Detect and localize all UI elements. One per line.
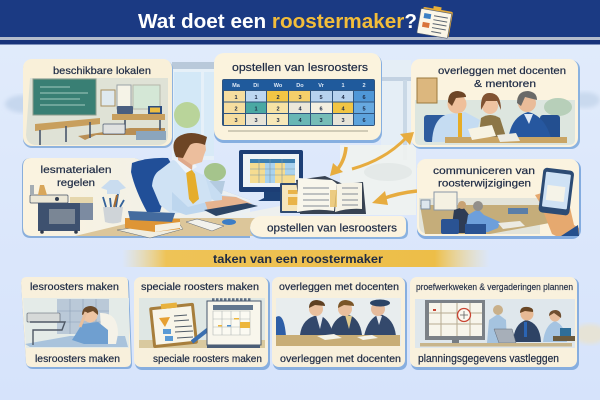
arrow: communication to book [372,191,417,205]
far arm [203,174,252,208]
card: lesroosters maken: lesroosters maken [30,282,119,293]
row 2 [224,102,374,113]
timetable: Ma [232,83,241,89]
heading: communiceren van [433,166,535,177]
heading: opstellen van lesroosters [232,62,369,74]
arrow: book to meeting [352,132,414,169]
panel: lesmaterialen regelen [22,158,250,238]
timetable: Di [253,83,259,89]
timetable: Wo [274,83,283,89]
row 3: 3 [254,118,258,124]
person [152,133,252,215]
card: lesroosters maken [21,277,132,369]
panel: desk with scheduler [75,133,303,238]
keyboard [204,203,258,216]
panel: lesmaterialen regelen: regelen [57,178,95,189]
row 2: 4 [341,106,345,112]
row 2: 6 [319,106,323,112]
icon: phone in hand [535,167,579,236]
hair [173,133,207,158]
illustration: resting teacher [23,298,129,348]
timetable: Vr [318,83,325,89]
row 1: 4 [341,95,345,101]
card: speciale roosters maken [134,277,270,370]
card: overleggen met docenten: overleggen met docenten [280,354,401,365]
torso [152,160,212,214]
timetable: 1 [341,83,345,89]
office illustration [419,192,555,234]
monitor [239,150,303,201]
row 1: 3 [298,95,302,101]
meeting illustration [415,78,575,145]
section heading band: taken van een roostermaker [213,253,384,266]
row 1: 5 [319,95,323,101]
panel: beschikbare lokalen [23,59,173,148]
card: speciale roosters maken: speciale roosters maken [141,282,259,293]
arrow: table to book [330,147,346,176]
row 3: 3 [234,118,238,124]
row 3: 6 [362,118,366,124]
row 1: 6 [362,95,366,101]
heading: overleggen met docenten [438,66,566,77]
row 2: 2 [234,106,238,112]
title: Wat doet een roostermaker? [138,10,417,33]
timetable: Do [296,83,304,89]
chair [131,158,172,212]
icon: clipboard schedule [417,4,453,39]
row 3: 3 [341,118,345,124]
row 1: 2 [276,95,280,101]
row 2: 4 [298,106,302,112]
card: overleggen met docenten: overleggen met docenten [279,282,399,293]
notepad and mouse [186,206,280,231]
near arm [172,192,212,215]
illustration: clipboard and calendar [139,298,265,348]
heading: beschikbare lokalen [53,66,151,77]
panel: overleggen met docenten en mentoren: & mentoren [474,79,536,90]
panel: overleggen met docenten en mentoren [411,59,580,149]
row 2: 2 [276,106,280,112]
timetable: 2 [362,83,366,89]
card: proefwerkweken en vergaderingen plannen: planningsgegevens vastleggen [418,353,559,365]
row 3 [224,114,374,125]
row 1: 1 [234,95,238,101]
pen cup [103,194,124,224]
row 3: 3 [319,118,323,124]
heading: lesmaterialen [40,165,112,176]
timetable [222,79,375,126]
row 2: 1 [254,106,258,112]
panel: communiceren van roosterwijzigingen [417,159,581,239]
plant [204,163,226,194]
equipment machine [30,185,93,234]
row 3: 3 [276,118,280,124]
background office window scene [5,60,600,344]
label: opstellen van lesroosters: opstellen van lesroosters [267,222,398,234]
open book and tablet [280,176,366,214]
tie [186,170,199,204]
collar [174,159,197,173]
card: lesroosters maken: lesroosters maken [35,354,120,365]
books [117,211,183,238]
row 2: 5 [362,106,366,112]
illustration: three teachers [276,298,401,346]
row 3: 4 [298,118,302,124]
label: opstellen van lesroosters [250,216,408,239]
row 1: 1 [254,95,258,101]
header bar [0,0,600,44]
panel: opstellen van lesroosters [214,53,382,143]
card: speciale roosters maken: speciale roosters maken [153,354,262,365]
card: proefwerkweken en vergaderingen plannen: proefwerkweken & vergaderingen plannen [416,282,573,292]
icon: cloth [101,180,126,194]
neck and face [178,152,193,170]
illustration: planning screen and colleagues [415,299,575,348]
classroom illustration [26,78,168,145]
card: overleggen met docenten [272,277,407,370]
section heading band [122,250,490,267]
row 1 [224,91,374,102]
card: proefwerkweken en vergaderingen plannen [410,277,579,370]
panel: communiceren van roosterwijzigingen: roosterwijzigingen [438,178,531,190]
